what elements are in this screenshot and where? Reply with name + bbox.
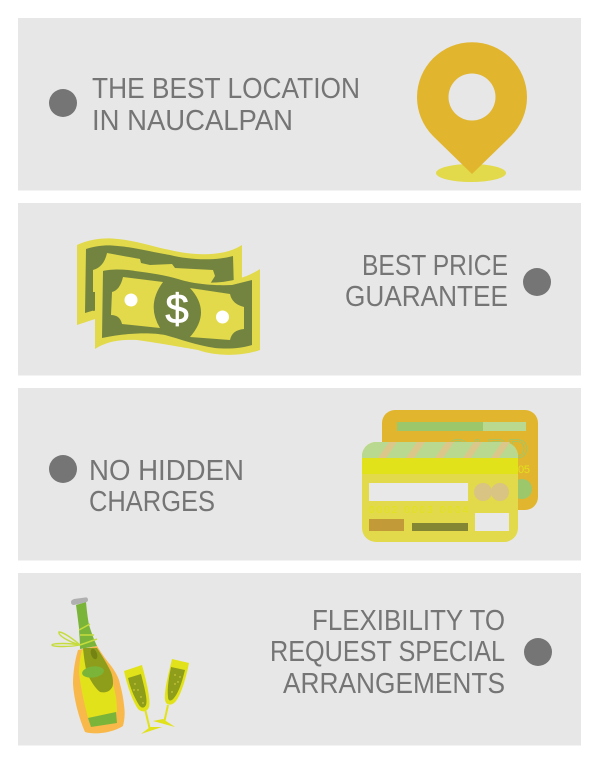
text: price: BEST PRICE	[362, 250, 508, 282]
champagne glass left	[124, 665, 162, 734]
champagne glass right	[153, 659, 189, 727]
panel background: charges	[18, 388, 581, 560]
bullet: charges	[49, 455, 77, 483]
icon: credit cards	[362, 410, 538, 542]
back card	[382, 410, 538, 510]
text: arrangements: ARRANGEMENTS	[283, 668, 505, 700]
panel: arrangements	[18, 573, 581, 746]
text: arrangements: REQUEST SPECIAL	[270, 636, 505, 668]
text: charges: CHARGES	[89, 486, 215, 518]
text: charges	[89, 455, 244, 518]
text: arrangements	[270, 605, 505, 700]
text: location	[92, 73, 360, 137]
back card: CARD	[447, 434, 528, 464]
front banknote	[95, 269, 260, 355]
panel: location	[18, 18, 581, 190]
front card: 0002 0003 0004	[369, 505, 468, 516]
bullet: location	[49, 89, 77, 117]
text: charges: NO HIDDEN	[89, 455, 244, 487]
text: price	[345, 250, 508, 313]
panel: charges	[18, 388, 581, 560]
panel background: price	[18, 203, 581, 376]
front banknote: $	[165, 285, 189, 332]
panel background: location	[18, 18, 581, 190]
text: location: IN NAUCALPAN	[92, 105, 293, 137]
panel: price	[18, 203, 581, 376]
icon: map pin	[417, 42, 527, 182]
bullet: arrangements	[524, 638, 552, 666]
front card	[362, 442, 518, 542]
icon: banknotes	[77, 238, 260, 355]
text: price: GUARANTEE	[345, 281, 508, 313]
back card: 05	[518, 464, 530, 476]
back banknote	[77, 238, 242, 325]
text: arrangements: FLEXIBILITY TO	[312, 605, 505, 637]
champagne bottle	[52, 597, 125, 733]
text: location: THE BEST LOCATION	[92, 73, 360, 105]
icon: champagne	[52, 597, 189, 734]
bullet: price	[523, 268, 551, 296]
panel background: arrangements	[18, 573, 581, 746]
